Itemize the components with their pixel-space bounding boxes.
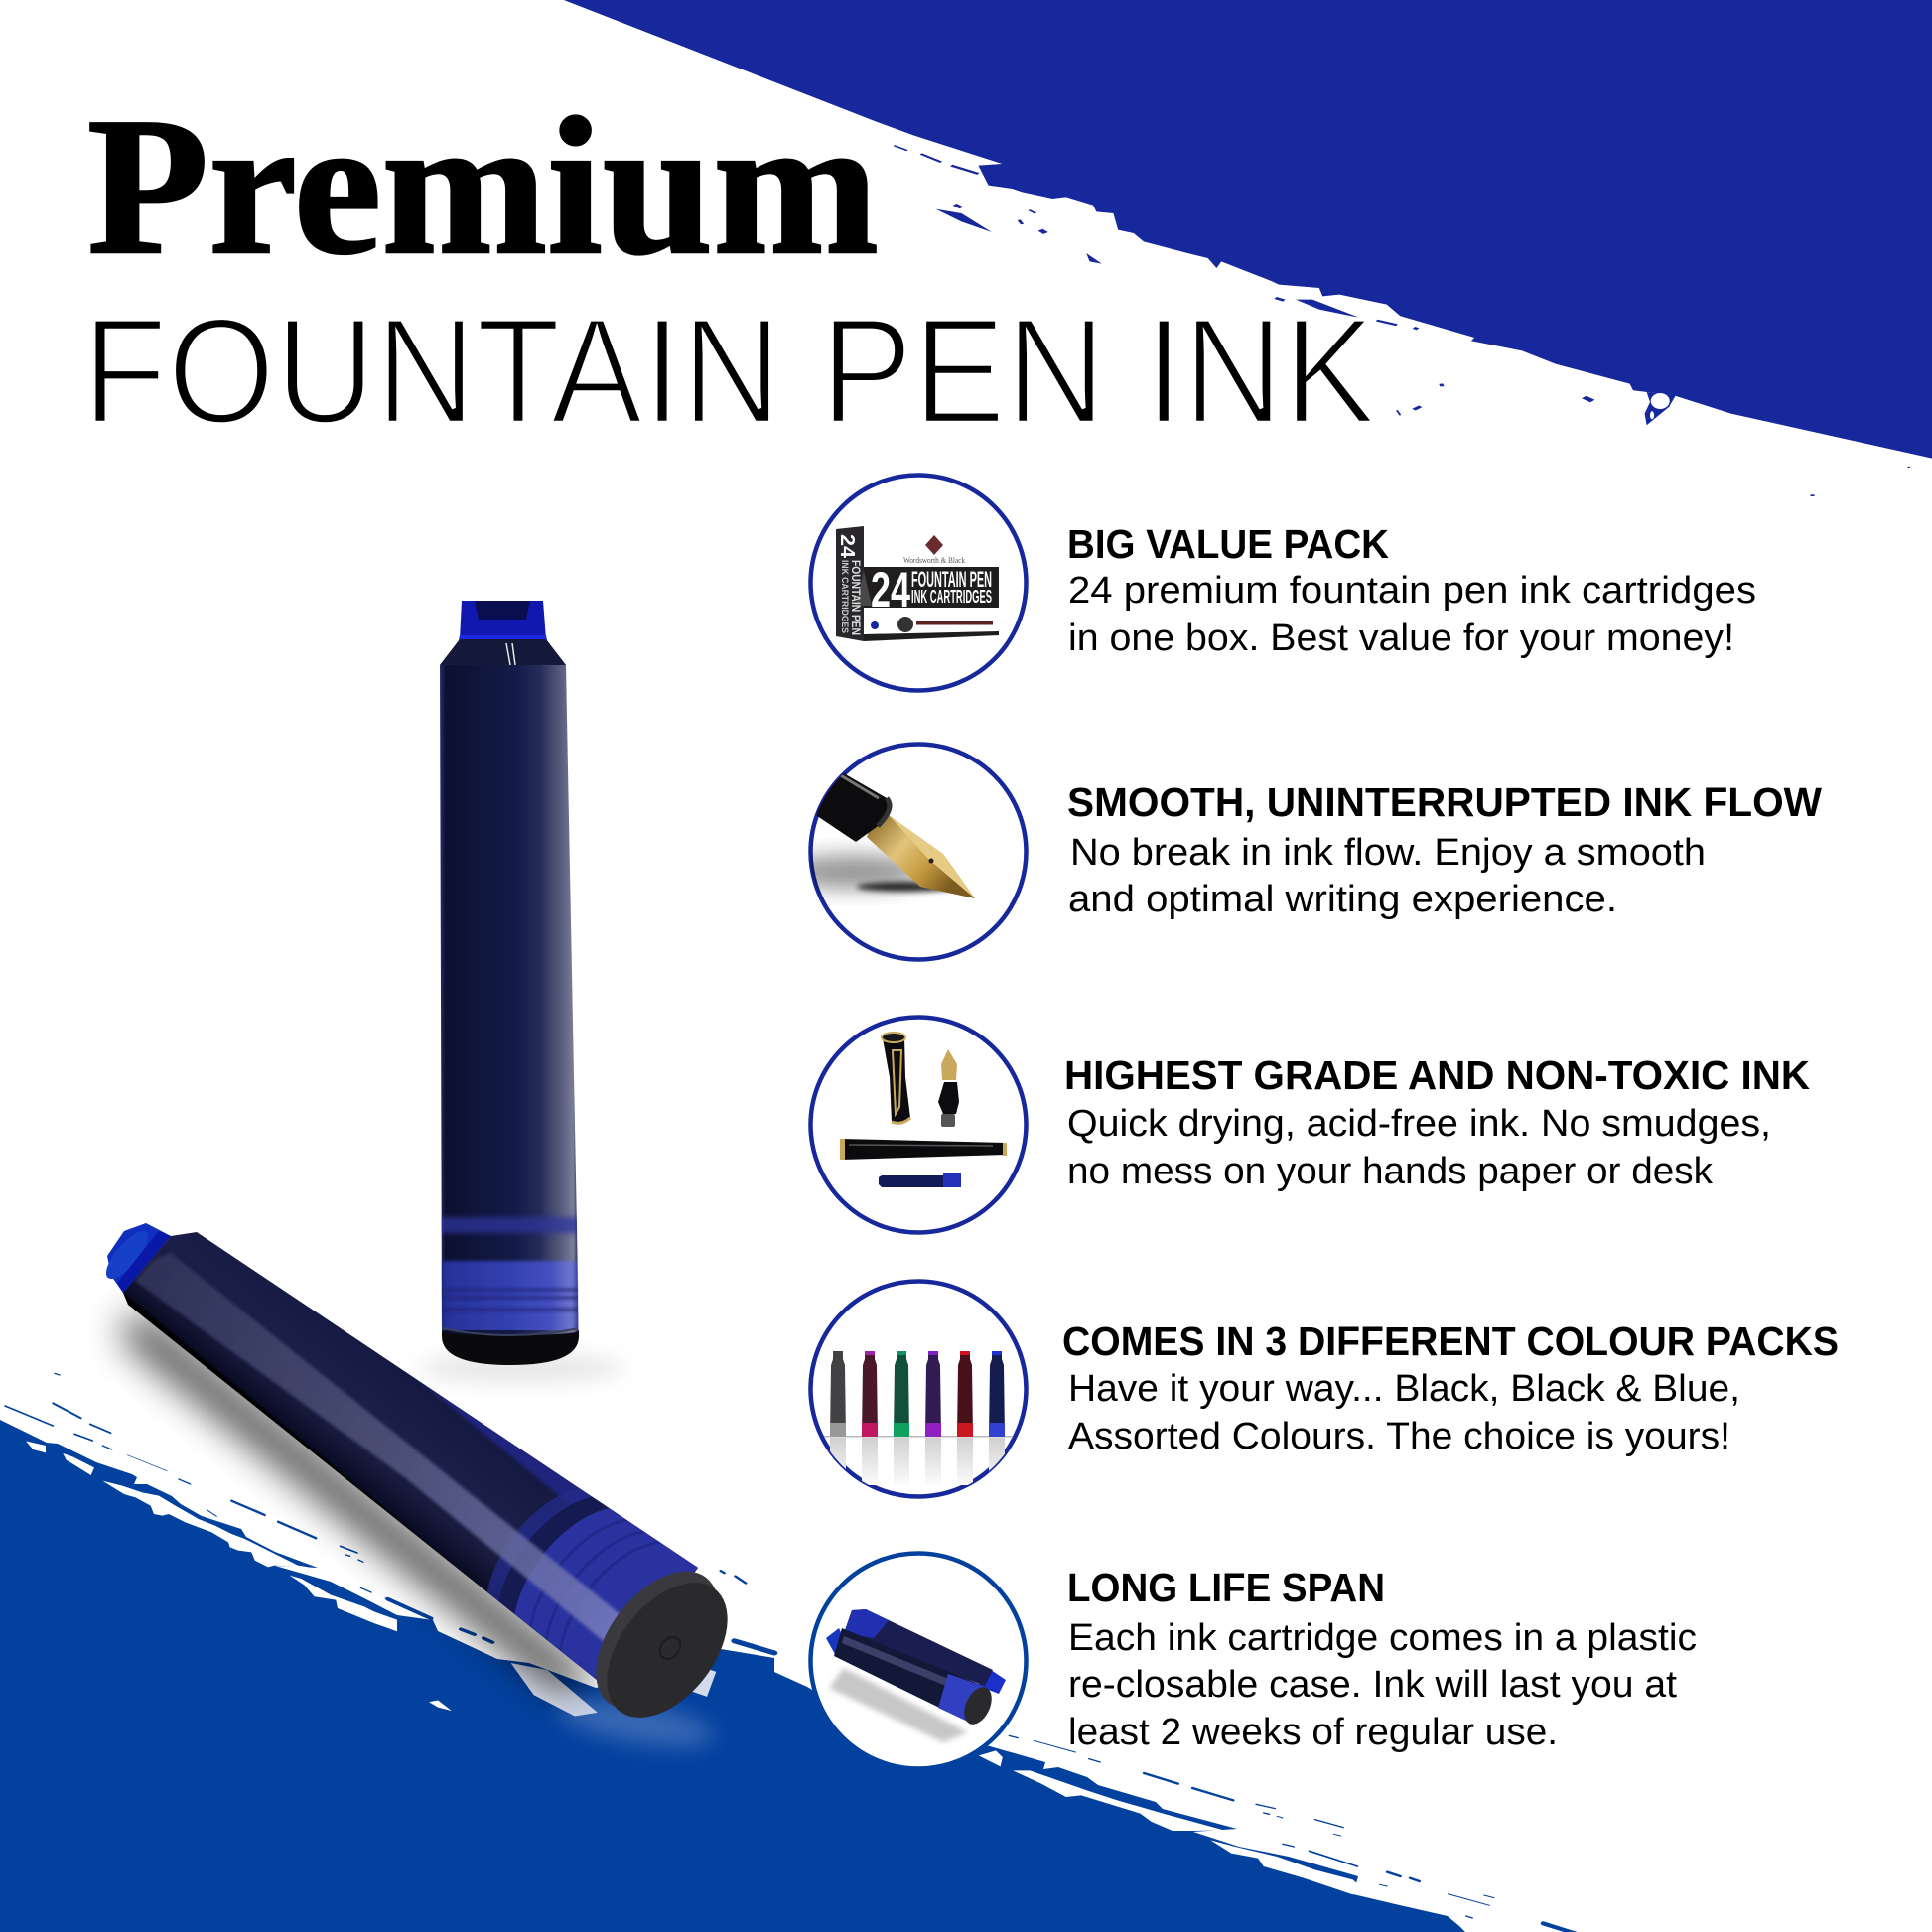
feature 1 text: in one box. Best value for your money! [1068,618,1734,659]
feature 3 text: no mess on your hands paper or desk [1067,1151,1714,1192]
feature circle 2: pen nib [777,745,1027,959]
product: upright ink cartridge [417,601,625,1382]
feature 1 text: BIG VALUE PACK [1067,521,1389,567]
feature 2 text: No break in ink flow. Enjoy a smooth [1070,832,1706,874]
feature 3 text [1064,1052,1810,1192]
feature 1 text: 24 premium fountain pen ink cartridges [1068,570,1756,612]
bottom blue ink brush stroke [0,1373,1588,1932]
feature 1 text [1067,521,1756,659]
feature circle 4: colour cartridges [810,1281,1027,1497]
feature 3 text: HIGHEST GRADE AND NON-TOXIC INK [1064,1052,1810,1098]
feature circle 1: product box: FOUNTAIN PEN [911,567,992,592]
feature 2 text [1067,779,1822,920]
feature 5 text [1067,1565,1697,1753]
feature circle 1: product box: 24 [836,534,858,559]
feature 4 text: Have it your way... Black, Black & Blue, [1068,1368,1740,1410]
feature circle 5: pair of cartridges [810,1553,1027,1769]
feature 2 text: SMOOTH, UNINTERRUPTED INK FLOW [1067,779,1822,825]
feature circle 3: pen parts [810,1017,1027,1233]
title: Premium: Premium [87,77,879,295]
feature circle 1: product box: 24 [871,562,910,618]
feature circle 1: product box [810,475,1027,691]
feature circle 1: product box: INK CARTRIDGES [911,587,992,607]
subtitle: fountain pen ink: FOUNTAIN PEN INK [82,287,1376,456]
feature circle 1: product box: FOUNTAIN PEN [849,560,863,635]
feature 5 text: LONG LIFE SPAN [1067,1565,1385,1610]
feature 5 text: least 2 weeks of regular use. [1068,1712,1558,1753]
feature 4 text [1062,1318,1839,1457]
feature 4 text: COMES IN 3 DIFFERENT COLOUR PACKS [1062,1318,1839,1364]
feature 4 text: Assorted Colours. The choice is yours! [1068,1416,1730,1457]
top blue ink brush stroke [564,0,1932,496]
feature circle 1: product box: Wordsworth & Black [903,556,965,565]
feature 5 text: Each ink cartridge comes in a plastic [1068,1617,1697,1659]
feature 5 text: re-closable case. Ink will last you at [1068,1664,1677,1706]
feature 3 text: Quick drying, acid-free ink. No smudges, [1067,1103,1771,1145]
feature 2 text: and optimal writing experience. [1068,879,1617,920]
product: lying ink cartridge [99,1223,728,1756]
feature circle 1: product box: INK CARTRIDGES [840,560,850,633]
